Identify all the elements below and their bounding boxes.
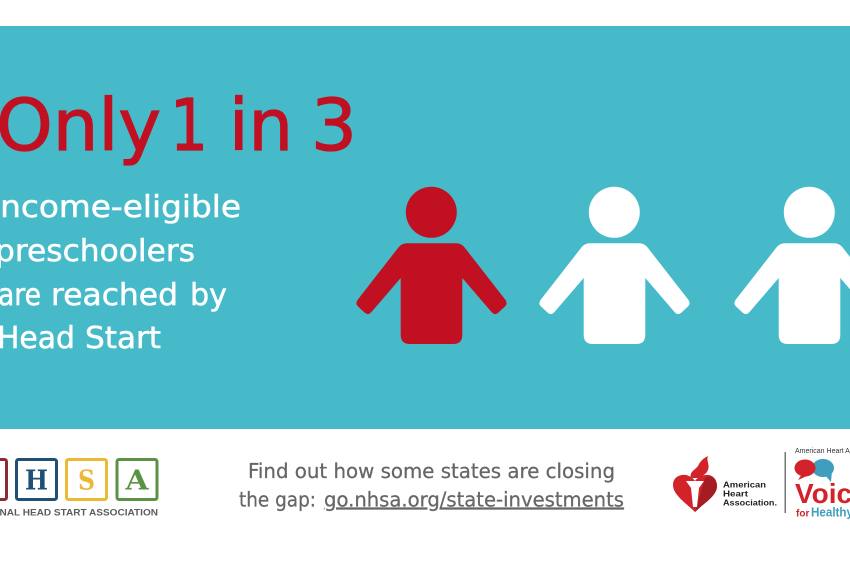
text block: income-eligible preschoolers are reached by Head Start: preschoolers <box>0 234 195 269</box>
icon: white person right <box>734 187 850 344</box>
logo: Voices for Healthy Kids <box>794 448 850 520</box>
wordmark: Heart <box>723 488 748 498</box>
text block: call to action: go.nhsa.org/state-investments <box>324 488 624 512</box>
icon: red person <box>356 187 507 344</box>
text block: call to action: the gap: <box>239 488 316 512</box>
block S: S <box>78 466 95 496</box>
wordmark <box>723 480 777 508</box>
text block: income-eligible preschoolers are reached by Head Start: reached <box>51 278 178 313</box>
text block: call to action: Find out how some states are closing <box>248 459 615 483</box>
wordmark: Association. <box>723 498 777 508</box>
text block: income-eligible preschoolers are reached by Head Start: by <box>190 278 227 313</box>
text block: call to action <box>239 459 624 512</box>
block H <box>16 460 56 500</box>
logo: American Heart Association <box>673 456 777 512</box>
heading: Only 1 in 3: in <box>229 84 293 167</box>
wordmark: for Healthy Kids: for <box>796 508 809 520</box>
text block: income-eligible preschoolers are reached by Head Start <box>0 190 241 356</box>
block S <box>66 460 106 500</box>
text block: income-eligible preschoolers are reached by Head Start: Start <box>85 321 161 356</box>
icon: speech bubbles <box>794 459 834 482</box>
block A: A <box>124 466 150 496</box>
icon: white person middle <box>539 187 690 344</box>
icon: heart and torch <box>673 456 717 512</box>
divider <box>785 452 786 513</box>
wordmark: American <box>723 480 766 490</box>
heading: Only 1 in 3: 1 <box>170 84 208 167</box>
heading: Only 1 in 3 <box>0 84 357 167</box>
block A <box>117 460 157 500</box>
block H: H <box>25 466 48 496</box>
panel: teal banner <box>0 26 850 429</box>
heading: Only 1 in 3: Only <box>0 84 161 167</box>
logo: National Head Start Association <box>0 460 158 518</box>
block N <box>0 460 6 500</box>
heading: Only 1 in 3: 3 <box>311 84 357 167</box>
